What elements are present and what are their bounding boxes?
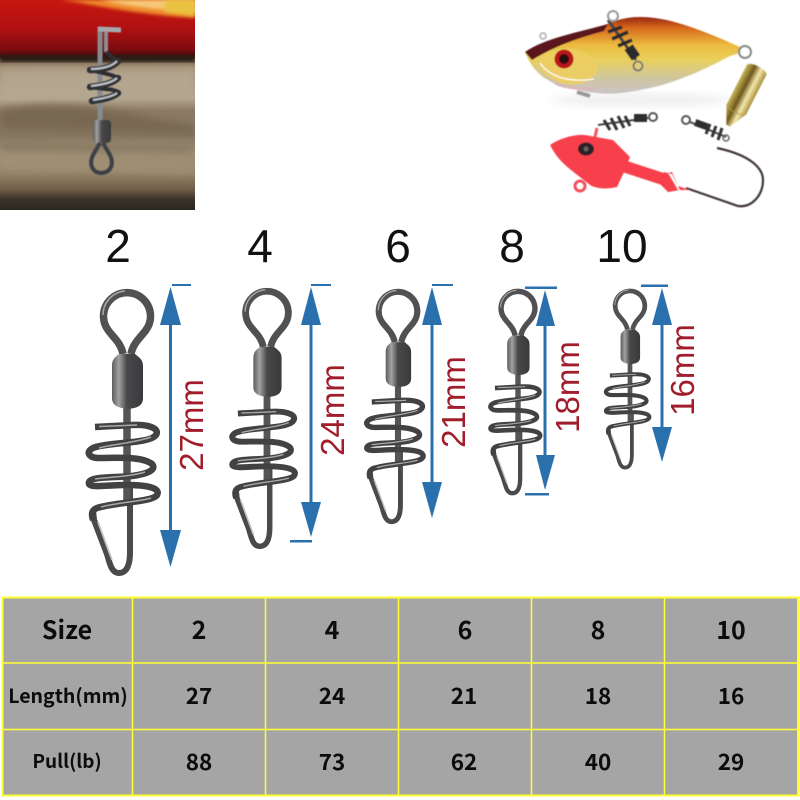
table row: pull: Pull(lb) xyxy=(32,747,102,774)
icon: swivel on wood photo xyxy=(90,27,121,173)
size label 4: 4 xyxy=(247,220,273,272)
table row: size: Size xyxy=(42,611,92,647)
table row: pull: 29 xyxy=(718,745,744,777)
table row: length: 16 xyxy=(718,679,744,711)
dimension arrow: 21mm: 21mm xyxy=(435,356,472,448)
table row: pull: 40 xyxy=(585,745,611,777)
size label 8: 8 xyxy=(499,220,525,272)
icon: brass bullet weight xyxy=(718,61,768,131)
photo: swivel clipped on lure resting on wood xyxy=(0,0,195,210)
table row: pull xyxy=(32,745,744,777)
table row: length: 21 xyxy=(451,679,477,711)
table row: length: Length(mm) xyxy=(8,680,128,709)
swivel size 4 xyxy=(232,290,295,546)
table row: length: 24 xyxy=(319,679,345,711)
table row: size: 2 xyxy=(192,611,206,647)
dimension arrow: 24mm xyxy=(290,284,351,542)
table row: size: 6 xyxy=(458,611,472,647)
photo: lures with swivels and brass weight xyxy=(525,11,768,206)
icon: small swivel right xyxy=(682,116,729,141)
icon: red jig head with hook xyxy=(550,128,763,206)
table row: size: 10 xyxy=(716,611,746,647)
table row: length: 18 xyxy=(585,679,611,711)
table row: pull: 73 xyxy=(319,745,345,777)
size label 2: 2 xyxy=(105,220,131,272)
table row: size xyxy=(42,611,746,647)
size label 10: 10 xyxy=(596,220,648,272)
swivel size 8 xyxy=(490,290,540,493)
specification table xyxy=(2,597,798,796)
dimension arrow: 18mm: 18mm xyxy=(549,341,586,433)
table row: length xyxy=(8,679,744,711)
dimension arrow: 16mm: 16mm xyxy=(664,324,701,416)
icon: small swivel left xyxy=(598,113,657,130)
dimension arrow: 21mm xyxy=(422,284,472,518)
dimension arrow: 27mm: 27mm xyxy=(173,379,210,471)
dimension arrow: 16mm xyxy=(641,284,701,462)
table row: size: 8 xyxy=(591,611,605,647)
table row: pull: 88 xyxy=(186,745,212,777)
size label 6: 6 xyxy=(385,220,411,272)
icon: crankbait lure xyxy=(525,11,751,96)
table row: pull: 62 xyxy=(451,745,477,777)
swivel size 2 xyxy=(89,291,158,573)
table row: length: 27 xyxy=(186,679,212,711)
swivel size 6 xyxy=(367,290,423,522)
dimension arrow: 18mm xyxy=(525,286,586,496)
dimension arrow: 24mm: 24mm xyxy=(314,364,351,456)
dimension arrow: 27mm xyxy=(160,284,210,567)
table row: size: 4 xyxy=(325,611,340,647)
swivel size 10 xyxy=(606,290,649,468)
